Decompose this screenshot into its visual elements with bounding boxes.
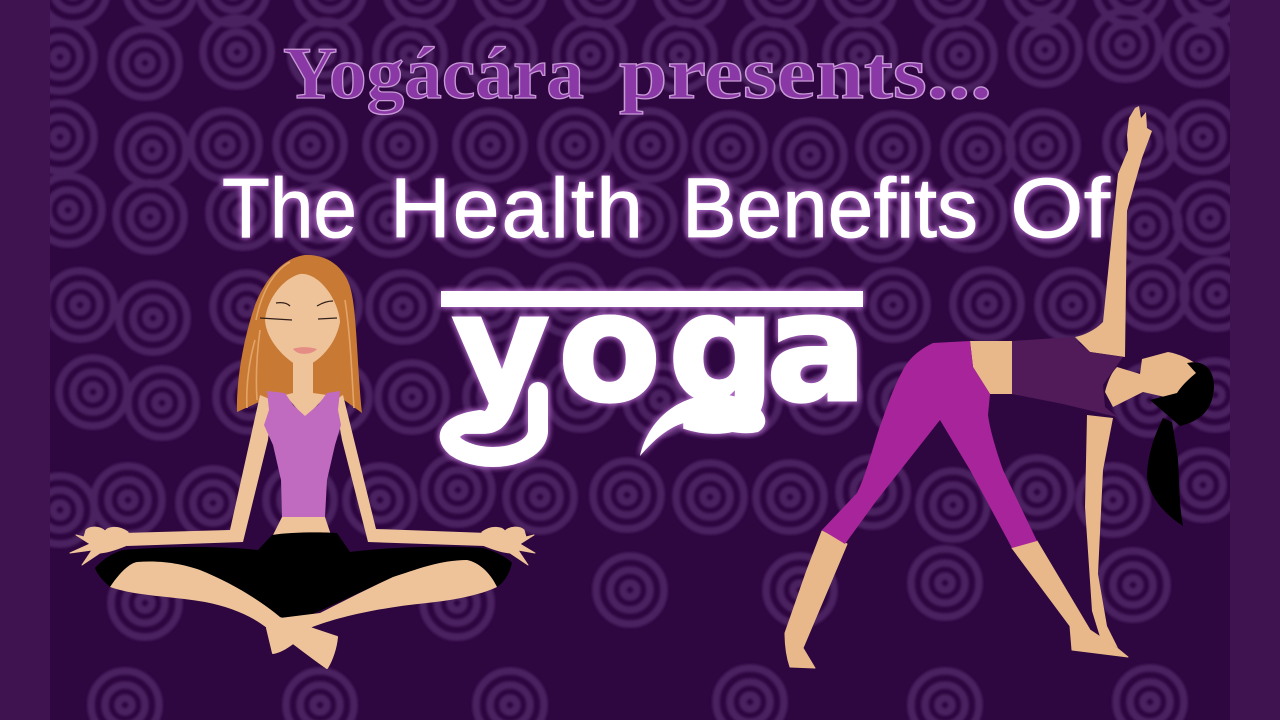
yoga wordmark: yoga [452,262,867,436]
midriff [272,517,331,537]
left side bar [0,0,50,720]
black trousers [95,532,512,620]
left thigh [110,562,312,630]
lower arm and hand [1085,415,1118,648]
pink top [264,391,341,517]
left lower leg [785,531,847,668]
right thigh [268,560,497,628]
heading: Benefits [682,161,978,255]
ponytail [1147,418,1183,526]
magenta leggings [822,341,1037,548]
midriff [970,341,1012,394]
presenter line: presents... [619,33,992,115]
eyes and brows [260,301,337,320]
right side bar [1230,0,1280,720]
feet [267,620,337,668]
presenter line: Yogácára [283,33,584,115]
heading: Health [390,161,643,255]
left arm [122,395,272,546]
face [265,274,340,368]
hair highlights [247,262,354,408]
right lower leg [1012,541,1128,657]
neck and chest [285,360,327,418]
heading: Of [1010,161,1111,255]
right hand [480,527,535,565]
right arm [335,395,488,546]
illustration: meditating woman [70,255,535,668]
lips [293,347,317,354]
hair [237,255,362,413]
heading [222,161,1111,255]
illustration: triangle pose woman [785,106,1214,668]
black hair [1150,362,1214,426]
head and neck [1105,352,1200,407]
purple top [1012,337,1123,417]
raised arm and hand [1075,106,1152,357]
presenter line [283,33,992,115]
heading: The [222,161,357,255]
left hand [70,527,130,565]
